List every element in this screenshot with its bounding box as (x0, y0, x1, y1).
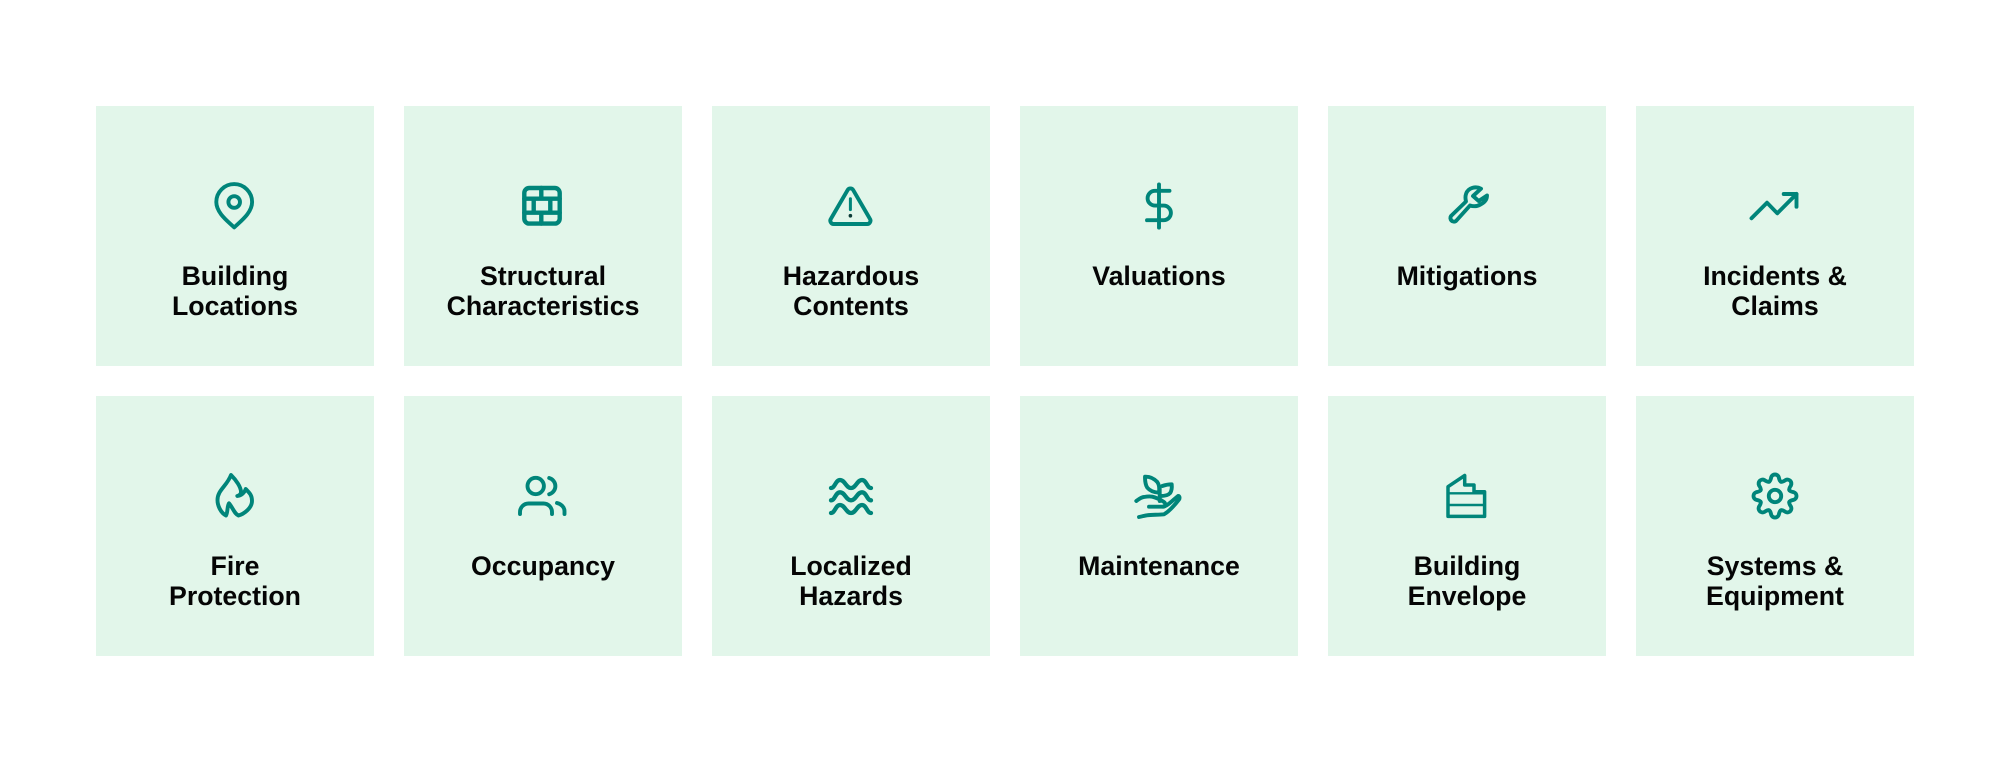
icon: warning triangle (828, 186, 872, 226)
label: Incidents & Claims (1703, 261, 1847, 320)
label: Fire Protection: Fire (211, 551, 259, 581)
panel: Fire Protection (96, 396, 374, 656)
panel: Systems & Equipment (1636, 396, 1914, 656)
icon: flame (216, 473, 254, 518)
label: Incidents & Claims: Incidents & (1703, 261, 1847, 291)
label: Building Envelope: Building (1414, 551, 1520, 581)
panel: Occupancy (404, 396, 682, 656)
label: Localized Hazards (790, 551, 912, 610)
label: Incidents & Claims: Claims (1731, 290, 1819, 320)
icon: map pin (214, 182, 254, 230)
label: Structural Characteristics (447, 261, 639, 320)
label: Fire Protection (169, 551, 301, 610)
label: Systems & Equipment: Equipment (1706, 580, 1844, 610)
label: Valuations: Valuations (1092, 261, 1226, 291)
label: Fire Protection: Protection (169, 580, 301, 610)
panel: Valuations (1020, 106, 1298, 366)
panel: Localized Hazards (712, 396, 990, 656)
label: Mitigations: Mitigations (1397, 261, 1537, 291)
label: Localized Hazards: Hazards (799, 580, 903, 610)
label: Localized Hazards: Localized (790, 551, 912, 581)
label: Hazardous Contents: Contents (793, 290, 909, 320)
label: Occupancy: Occupancy (471, 551, 615, 581)
panel: Building Locations (96, 106, 374, 366)
panel: Building Envelope (1328, 396, 1606, 656)
icon: dollar sign (1145, 182, 1173, 230)
icon: gear (1752, 472, 1798, 520)
panel: Maintenance (1020, 396, 1298, 656)
label: Hazardous Contents (783, 261, 919, 320)
label: Systems & Equipment (1706, 551, 1844, 610)
panel: Mitigations (1328, 106, 1606, 366)
icon: building section (1446, 474, 1486, 518)
label: Hazardous Contents: Hazardous (783, 261, 919, 291)
icon: brick wall (522, 186, 562, 226)
label: Systems & Equipment: Systems & (1707, 551, 1843, 581)
label: Structural Characteristics: Structural (480, 261, 606, 291)
label: Building Envelope: Envelope (1408, 580, 1526, 610)
panel: Incidents & Claims (1636, 106, 1914, 366)
icon: people (518, 476, 566, 516)
label: Maintenance: Maintenance (1078, 551, 1240, 581)
label: Building Envelope (1408, 551, 1526, 610)
icon: plant in hand (1134, 474, 1182, 519)
icon: waves (828, 478, 874, 516)
icon: trending up arrow (1749, 192, 1798, 220)
label: Building Locations: Locations (172, 290, 298, 320)
label: Building Locations (172, 261, 298, 320)
panel: Hazardous Contents (712, 106, 990, 366)
label: Structural Characteristics: Characteristics (447, 290, 639, 320)
panel: Structural Characteristics (404, 106, 682, 366)
icon: wrench (1448, 185, 1489, 224)
label: Building Locations: Building (182, 261, 288, 291)
